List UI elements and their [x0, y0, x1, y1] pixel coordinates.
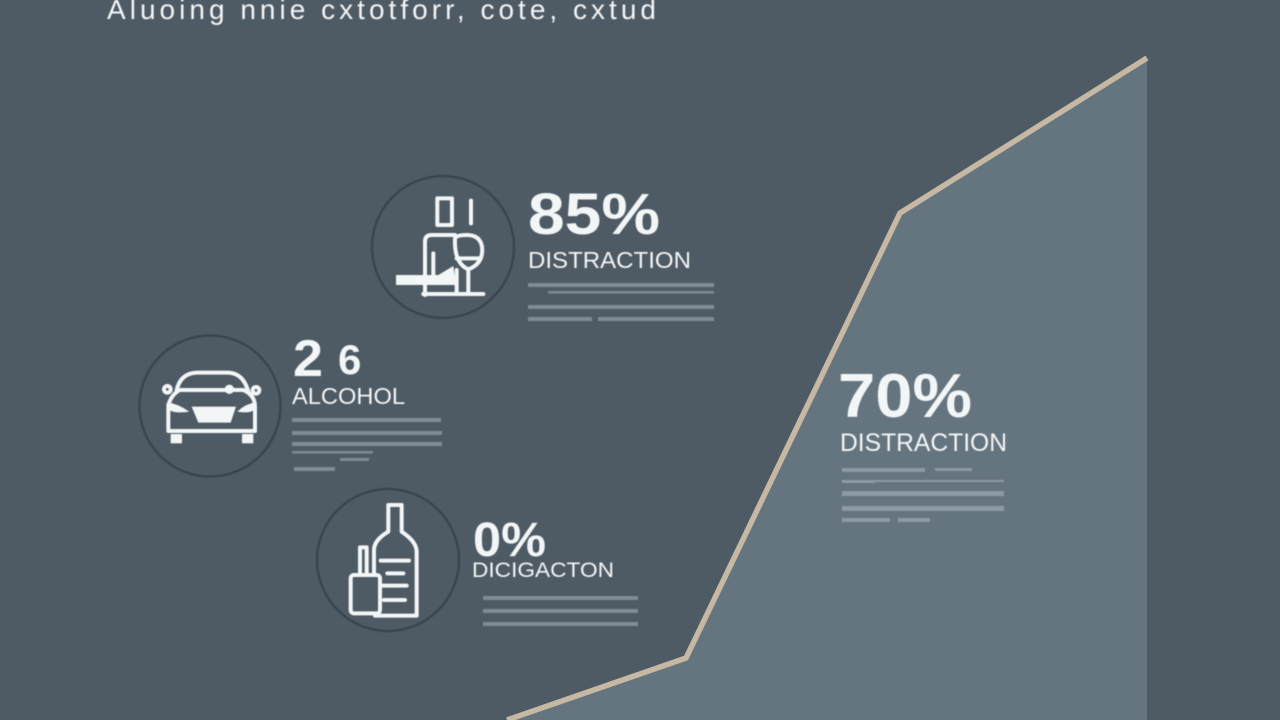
text lines: [528, 283, 714, 321]
text lines: [483, 596, 638, 626]
area chart: [507, 58, 1147, 720]
label: alcohol: ALCOHOL: [292, 383, 405, 409]
stat: 0%: 0%: [473, 514, 546, 567]
stat: 2 6: [293, 330, 361, 388]
text lines: [842, 468, 1004, 522]
panel: 0% distraction: [317, 489, 638, 631]
stat: 2 6: 6: [338, 336, 361, 383]
stat: 85%: 85%: [528, 182, 660, 247]
chart trend line: [507, 58, 1147, 720]
text lines: [292, 418, 442, 471]
panel: 85% distraction: [372, 176, 714, 321]
label: dicigacton: DICIGACTON: [472, 559, 614, 582]
icon: bottle and wine glass: [372, 176, 514, 318]
stat: 70%: 70%: [838, 362, 972, 431]
stat: 2 6: 2: [293, 330, 323, 388]
icon: car: [140, 336, 280, 476]
chart area fill: [507, 58, 1147, 720]
icon: bottles: [317, 489, 459, 631]
panel: alcohol: [140, 330, 442, 476]
panel: 70% distraction: [838, 362, 1007, 522]
label: distraction: DISTRACTION: [528, 247, 691, 273]
label: distraction: DISTRACTION: [840, 429, 1007, 457]
